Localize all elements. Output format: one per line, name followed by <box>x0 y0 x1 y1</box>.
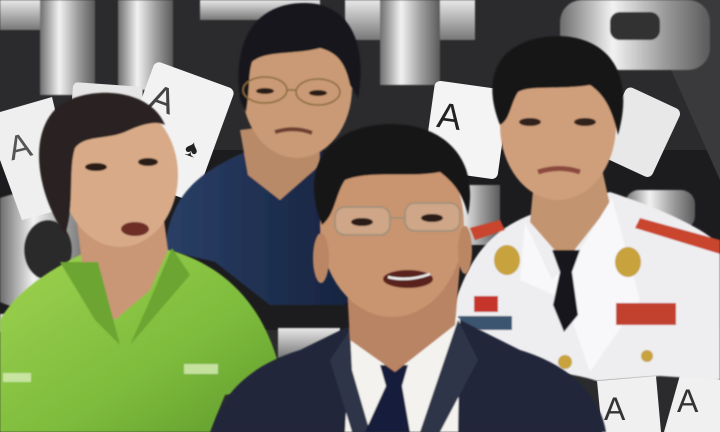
shirt logos <box>3 373 31 382</box>
background lettering: middle row <box>0 185 695 309</box>
badge: collar right <box>615 247 641 277</box>
card: back left <box>70 82 143 127</box>
card: bottom right 2 <box>664 368 720 432</box>
card: centre left: A <box>144 76 181 122</box>
name badge <box>458 316 512 330</box>
flag pin <box>474 296 498 312</box>
epaulette: left shoulder <box>470 220 505 240</box>
card: centre right: ♠ <box>436 134 450 158</box>
card: left <box>0 97 78 220</box>
background lettering: top row <box>0 0 710 95</box>
background lettering: bottom row <box>0 314 340 358</box>
person: top centre, navy shirt <box>165 3 361 305</box>
epaulette: right shoulder <box>635 218 720 254</box>
badge: collar left <box>494 245 520 275</box>
card: bottom right 2: A <box>677 383 699 419</box>
person: centre front, dark suit <box>212 124 606 432</box>
card: centre left <box>114 61 235 202</box>
person: right, white uniform <box>450 36 720 381</box>
card: centre right: A <box>435 94 464 138</box>
card: bottom right 1: A <box>604 391 626 427</box>
card: bottom right 1 <box>597 376 661 432</box>
person: left, green polo <box>0 93 280 432</box>
card: right <box>596 86 682 179</box>
card: centre right <box>423 80 510 180</box>
card: left: A <box>4 126 36 168</box>
medal ribbons <box>616 303 676 325</box>
card: centre left: ♠ <box>181 134 203 164</box>
